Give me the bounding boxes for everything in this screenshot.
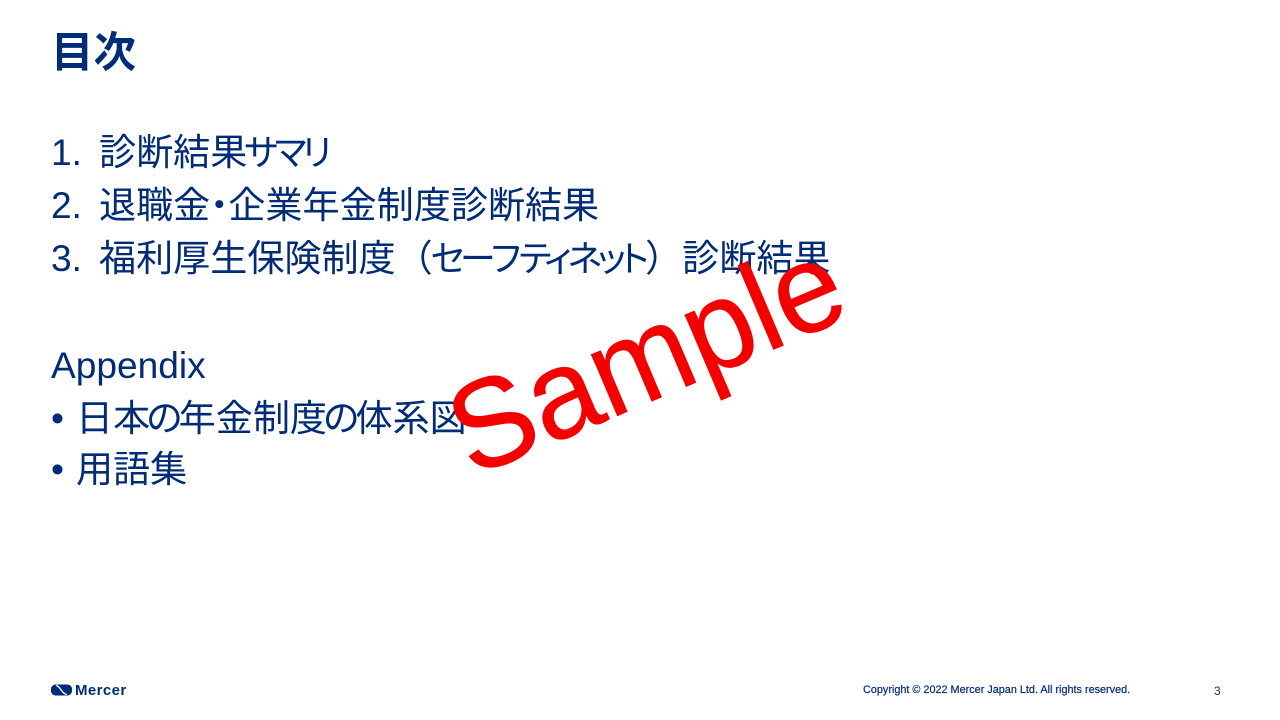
appendix list xyxy=(51,344,467,490)
appendix item 1: • xyxy=(51,397,64,439)
appendix heading: Appendix xyxy=(51,344,206,386)
title: 目次 xyxy=(51,30,136,77)
appendix list: 用語集 xyxy=(76,448,187,490)
item 1 xyxy=(51,131,335,173)
page number: 3 xyxy=(1214,684,1221,698)
contents list: 退職金・企業年金制度診断結果 xyxy=(99,184,599,226)
item 3: 3. xyxy=(51,237,82,279)
contents list xyxy=(51,131,830,279)
contents list: 診断結果サマリ xyxy=(99,131,335,173)
appendix item 1 xyxy=(51,397,467,439)
appendix item 2: • xyxy=(51,448,64,490)
item 2 xyxy=(51,184,599,226)
appendix list: 日本の年金制度の体系図 xyxy=(76,397,467,439)
sample watermark: Sample xyxy=(428,211,864,502)
contents list: 福利厚生保険制度（セーフティネット）診断結果 xyxy=(99,237,830,279)
item 1: 1. xyxy=(51,131,82,173)
logo wordmark: Mercer xyxy=(75,682,127,699)
icon: mercer logo xyxy=(51,684,72,696)
item 2: 2. xyxy=(51,184,82,226)
appendix item 2 xyxy=(51,448,187,490)
copyright: Copyright © 2022 Mercer Japan Ltd. All rights reserved. xyxy=(863,684,1130,696)
item 3 xyxy=(51,237,830,279)
